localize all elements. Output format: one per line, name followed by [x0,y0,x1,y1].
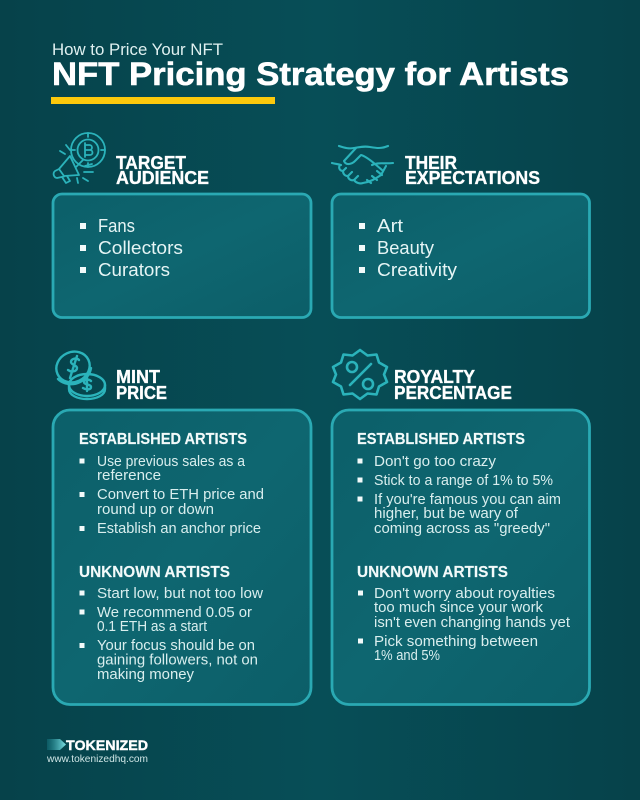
subheading: UNKNOWN ARTISTS [357,564,508,581]
website url: www.tokenizedhq.com [46,753,148,765]
section: royalty percentage [332,350,590,704]
list: audiences: Collectors [98,238,183,258]
established artists block [79,431,264,537]
heading [116,153,209,188]
panel: expectations list [332,194,590,318]
subheading: ESTABLISHED ARTISTS [357,431,525,448]
heading: TARGET [116,153,186,173]
icon: handshake [332,146,393,183]
established artists block: Stick to a range of 1% to 5% [374,472,553,489]
unknown artists block: Don't worry about royalties [374,585,555,602]
unknown artists block [357,564,571,664]
panel: mint price [53,410,311,704]
established artists block: Use previous sales as a [97,453,246,470]
unknown artists block: Your focus should be on [97,637,255,654]
panel: audience list [53,194,311,318]
list: audiences: Curators [98,260,170,280]
unknown artists block: Pick something between [374,633,538,650]
heading: PRICE [116,383,167,403]
unknown artists block: 0.1 ETH as a start [97,618,208,635]
established artists block: higher, but be wary of [374,505,519,522]
established artists block: coming across as "greedy" [374,520,550,537]
unknown artists block: We recommend 0.05 or [97,604,252,621]
list: expectations: Beauty [377,238,434,258]
unknown artists block: isn't even changing hands yet [374,614,571,631]
heading: AUDIENCE [116,168,209,188]
unknown artists block: gaining followers, not on [97,652,258,668]
icon: megaphone with coin target [54,133,105,183]
heading: THEIR [405,153,457,173]
unknown artists block: 1% and 5% [374,647,440,664]
icon: percent badge [333,350,387,399]
heading [394,367,512,403]
established artists block: If you're famous you can aim [374,491,561,508]
established artists block: round up or down [97,501,214,518]
list: expectations: Creativity [377,260,457,280]
logo mark [47,739,66,750]
established artists block: reference [97,467,161,484]
list: audiences [80,216,183,280]
icon: coins [51,346,105,399]
list: expectations [359,216,457,280]
heading [405,153,540,188]
section: mint price [51,346,311,704]
established artists block: Don't go too crazy [374,453,496,470]
yellow underline [51,97,275,104]
header: kicker, title and underline [51,40,569,104]
heading: MINT [116,367,160,387]
heading: ROYALTY [394,367,475,387]
unknown artists block: Start low, but not too low [97,585,263,602]
section: target audience [53,133,311,318]
heading: PERCENTAGE [394,383,512,403]
brand name: TOKENIZED [66,737,148,753]
established artists block: Convert to ETH price and [97,486,264,503]
unknown artists block [79,564,263,683]
footer: brand logo and url [46,737,148,765]
section: their expectations [332,146,590,318]
unknown artists block: too much since your work [374,599,543,616]
kicker text: How to Price Your NFT [52,40,223,59]
list: audiences: Fans [98,216,135,236]
main title: NFT Pricing Strategy for Artists [52,56,569,92]
established artists block: Establish an anchor price [97,520,261,537]
subheading: UNKNOWN ARTISTS [79,564,230,581]
unknown artists block: making money [97,666,194,683]
panel: royalty percentage [332,410,590,704]
subheading: ESTABLISHED ARTISTS [79,431,247,448]
list: expectations: Art [377,216,403,236]
heading: EXPECTATIONS [405,168,540,188]
established artists block [357,431,561,537]
heading [116,367,167,403]
